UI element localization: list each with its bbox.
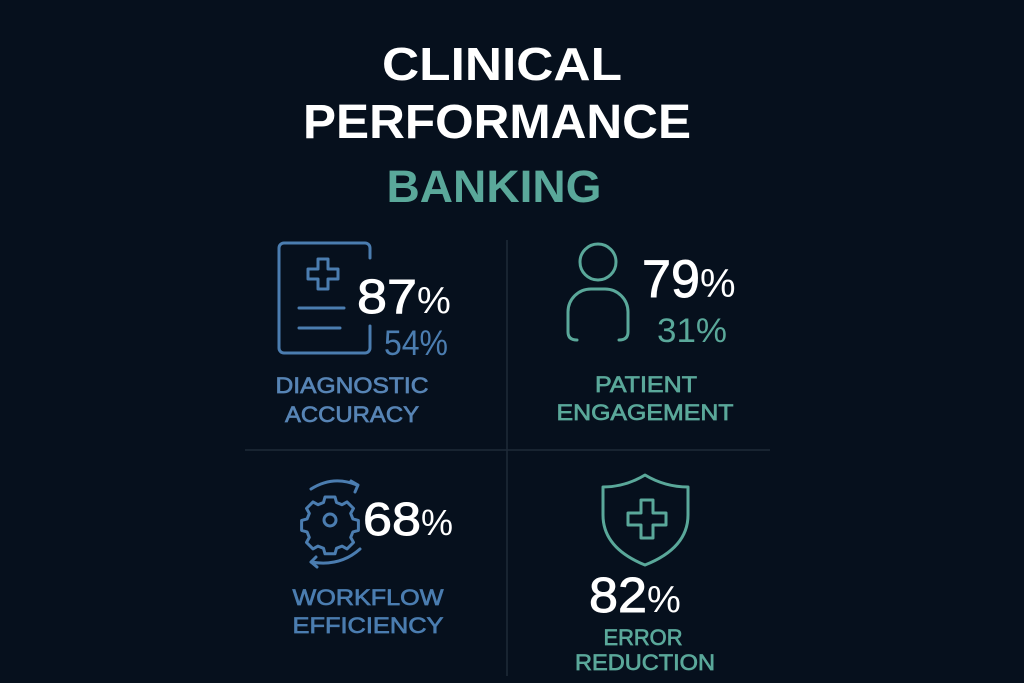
icon: shield with cross: [603, 475, 688, 565]
label: [575, 625, 715, 675]
icon: person: [568, 244, 628, 340]
stat: 82%: 82%: [589, 569, 681, 623]
label: ACCURACY: [285, 402, 419, 427]
stat: 68%: 68%: [363, 493, 453, 545]
panel: patient engagement: [556, 244, 736, 425]
label: ERROR: [604, 625, 682, 650]
label: REDUCTION: [575, 650, 715, 675]
label: DIAGNOSTIC: [276, 373, 429, 398]
icon: gear with arrows: [302, 481, 360, 567]
label: [276, 373, 429, 427]
label: [556, 372, 734, 425]
title: CLINICAL: [382, 38, 622, 90]
stat: 87%: 87%: [357, 271, 451, 324]
stat: 79%: 79%: [642, 250, 736, 309]
stat: 54%: 54%: [384, 324, 448, 363]
panel: diagnostic accuracy: [276, 243, 451, 427]
subtitle: BANKING: [386, 161, 602, 212]
label: WORKFLOW: [292, 585, 444, 610]
icon: medical document: [279, 243, 370, 353]
stat: 31%: 31%: [657, 312, 727, 350]
label: EFFICIENCY: [292, 613, 444, 638]
label: [292, 585, 444, 638]
label: ENGAGEMENT: [556, 400, 734, 425]
title: [303, 38, 691, 149]
label: PATIENT: [595, 372, 697, 397]
title: PERFORMANCE: [303, 96, 691, 149]
panel: error reduction: [575, 475, 715, 675]
panel: workflow efficiency: [292, 481, 453, 638]
